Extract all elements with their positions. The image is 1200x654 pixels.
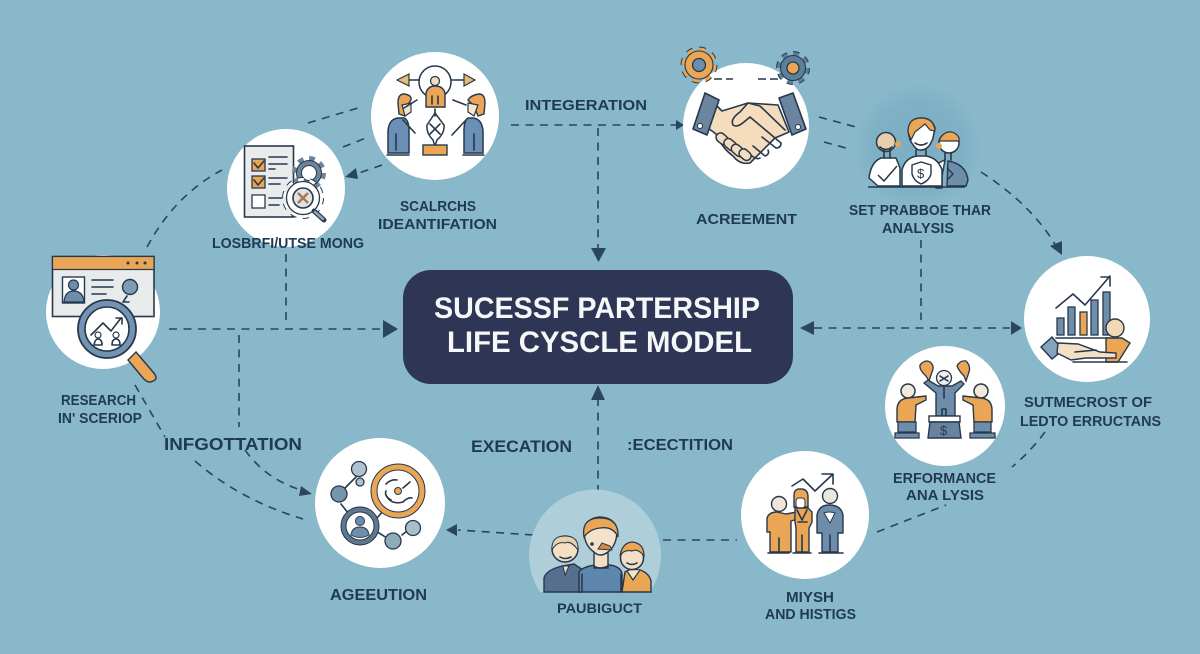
arrow: search to monitoring [345, 165, 382, 179]
label: miysh and histigs: AND HISTIGS [765, 606, 856, 623]
node: people group [529, 490, 661, 616]
arrow: double headed to center and chart node [800, 321, 1022, 335]
connector: partners to miysh [663, 539, 737, 541]
label: miysh and histigs [765, 589, 856, 623]
connector: analysis drop [920, 240, 922, 320]
icon: podium with figures [895, 361, 995, 438]
label: research [58, 392, 142, 427]
icon: left person [387, 94, 417, 155]
label: miysh and histigs: MIYSH [786, 589, 834, 606]
node: chart structures [1020, 256, 1161, 430]
connector: agreement lower link [824, 142, 846, 148]
connector: performance to structures [1012, 432, 1045, 467]
icon: gears [684, 50, 806, 82]
node: research [46, 255, 160, 427]
label: integration: INTEGERATION [525, 97, 647, 114]
label: research: RESEARCH [61, 392, 136, 409]
label: chart structures: SUTMECROST OF [1024, 394, 1152, 411]
icon: team with trend arrow [767, 474, 843, 553]
label: performance analysis: ANA LYSIS [906, 487, 984, 504]
label: secondary execution: :ECECTITION [627, 437, 733, 454]
connector: search upper link [343, 138, 366, 147]
label: chart structures: LEDTO ERRUCTANS [1020, 413, 1161, 430]
label: set analysis [849, 202, 991, 237]
label: set analysis: SET PRABBOE THAR [849, 202, 991, 219]
arrow: execution up to center [591, 385, 605, 493]
label: performance analysis [893, 470, 996, 504]
connector: arc to search node [308, 108, 358, 123]
node: miysh and histigs [741, 451, 869, 623]
icon: checklist [244, 146, 294, 217]
node: agreement [683, 50, 809, 228]
arrow: analysis to chart node [981, 172, 1062, 255]
icon: magnifier with chart [78, 300, 156, 382]
icon: orange target ring [374, 467, 422, 515]
connector: research arc upward [147, 170, 222, 247]
icon: handshake [693, 93, 806, 163]
icon: trophy on base [423, 109, 447, 155]
icon: network graph [331, 462, 420, 549]
arrow: negotiation to ageeution [245, 450, 312, 496]
icon: central figure with arrows [397, 66, 475, 107]
label: monitoring: LOSBRFI/UTSE MONG [212, 235, 364, 252]
icon: gears and magnifier [285, 159, 324, 220]
heading line 2: LIFE CYSCLE MODEL [447, 326, 752, 359]
icon: three people [544, 517, 651, 592]
label: performance analysis: ERFORMANCE [893, 470, 996, 487]
arrow: integration down to center [591, 128, 606, 262]
connector: miysh to performance [877, 505, 946, 532]
icon: profile ring [341, 507, 379, 545]
icon: podium with figures: $ [940, 423, 948, 438]
label: search identification [378, 198, 497, 233]
label: ageeution: AGEEUTION [330, 587, 427, 604]
connectors: dashed arrows [135, 108, 1062, 540]
icon: three people with dollar shield: $ [917, 166, 925, 181]
label: execution: EXECATION [471, 438, 572, 456]
connector: research curve to ageeution [195, 461, 303, 519]
icon: right person [452, 94, 485, 155]
icon: handshake with figure [1041, 319, 1130, 362]
node: performance analysis [885, 346, 1005, 504]
label: search identification: IDEANTIFATION [378, 216, 497, 233]
connector: research curve top [135, 385, 165, 437]
arrow: research to center [169, 320, 398, 338]
panel: central title [403, 270, 793, 384]
arrow: partners to agreement node [446, 524, 533, 536]
heading line 1: SUCESSF PARTERSHIP [434, 292, 760, 325]
label: chart structures [1020, 394, 1161, 430]
label: search identification: SCALRCHS [400, 198, 476, 215]
node: ageeution network [315, 438, 445, 604]
connector: monitoring down [285, 254, 287, 320]
label: set analysis: ANALYSIS [882, 220, 954, 237]
label: agreement: ACREEMENT [696, 211, 797, 228]
node: search identification [371, 52, 499, 233]
icon: three people with dollar shield [868, 118, 968, 188]
icon: bar chart with trend arrow [1056, 276, 1110, 338]
arrow: search to agreement [511, 120, 684, 130]
label: research: IN' SCERIOP [58, 410, 142, 427]
icon: browser window [52, 256, 154, 316]
label: people group: PAUBIGUCT [557, 600, 642, 616]
connector: agreement to set analysis [819, 117, 856, 127]
node: set analysis [849, 83, 991, 237]
connector: negotiation drop [238, 335, 240, 427]
node: monitoring [212, 129, 364, 252]
label: negotiation: INFGOTTATION [164, 434, 302, 454]
